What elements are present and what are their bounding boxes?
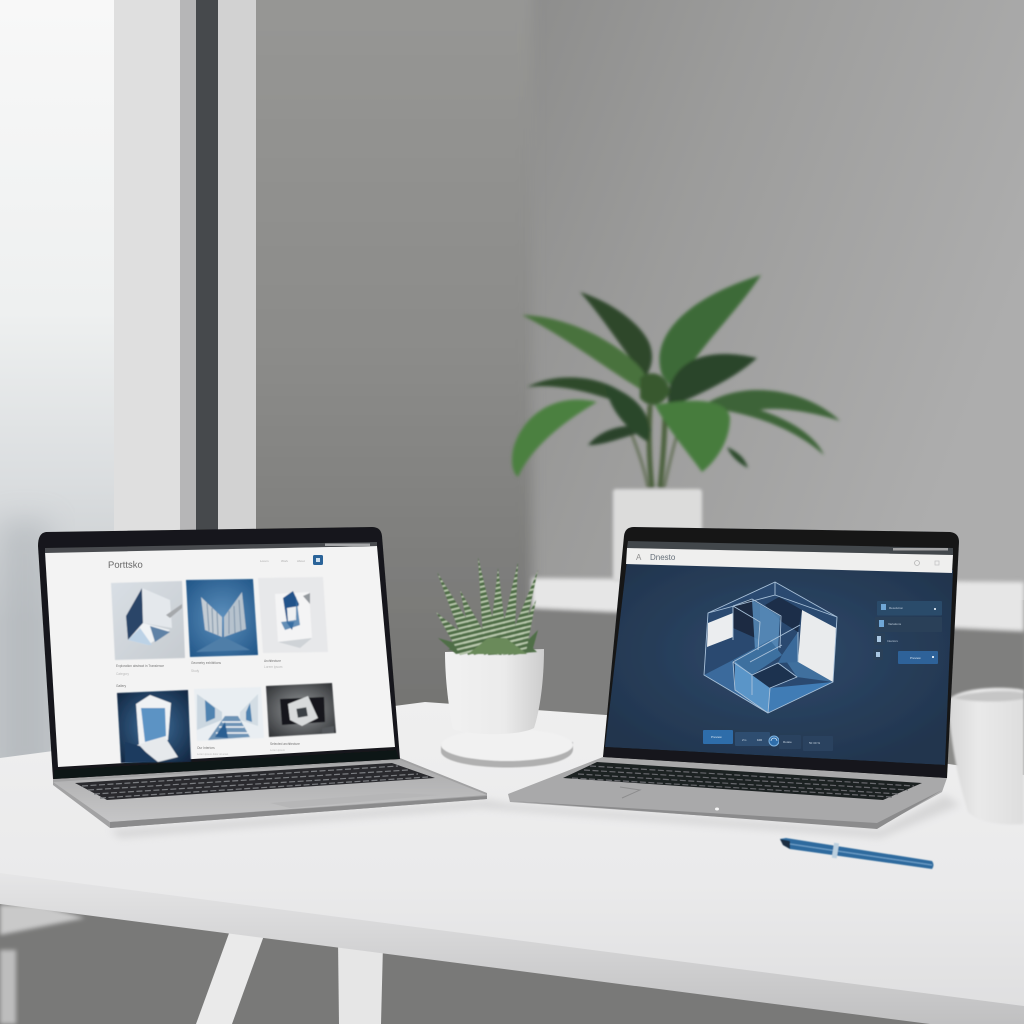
captions row 1: Geometry exhibitions <box>191 661 221 665</box>
captions row 1: Study <box>191 669 200 673</box>
app logo: A <box>636 553 642 562</box>
wall shelf <box>532 578 1024 720</box>
dark inner cubes <box>733 599 760 640</box>
captions row 2: Lorem ipsum <box>270 748 285 752</box>
blue pen <box>780 838 934 869</box>
left laptop base <box>53 758 487 828</box>
keyboard <box>563 762 922 800</box>
captions row 2: Our Interiors <box>197 746 215 750</box>
nav links and button: Work <box>281 559 288 563</box>
thumbnail 2 <box>186 579 258 657</box>
keyboard <box>75 763 435 800</box>
right app header bar <box>626 548 953 573</box>
nav links and button: Lorem <box>260 559 269 563</box>
succulent in white pot <box>436 557 544 734</box>
rotate icon <box>769 736 779 746</box>
white desk <box>0 702 1024 1024</box>
captions row 1: Gallery <box>116 684 127 688</box>
item 4 <box>873 649 883 660</box>
nav links and button <box>260 555 323 565</box>
right laptop lid <box>603 527 959 778</box>
right top status strip <box>627 541 953 555</box>
item 3: Interiors <box>887 639 898 643</box>
right laptop base <box>508 757 947 829</box>
plant pot <box>613 489 702 581</box>
right laptop screen <box>605 560 953 765</box>
isometric wireframe cube <box>704 582 837 713</box>
plant leaves <box>512 275 840 477</box>
segment 1: 100 <box>757 738 762 742</box>
left bottom bezel shadow <box>54 750 399 779</box>
left laptop screen <box>45 546 395 767</box>
wire lines <box>704 582 837 713</box>
captions row 2 <box>197 742 300 756</box>
captions row 1: Architecture <box>264 659 281 663</box>
captions row 1: Category <box>116 672 129 676</box>
thumbnail 5 <box>194 687 264 741</box>
white panels <box>707 613 733 647</box>
action button: Preview <box>910 656 922 660</box>
dropdown 1: Resolution <box>889 606 904 610</box>
captions row 1: Lorem ipsum <box>264 665 283 669</box>
plant stems <box>630 405 680 488</box>
segment 2: Rotate <box>783 740 792 744</box>
desk leg <box>196 925 266 1024</box>
right bottom bezel shadow <box>603 747 947 778</box>
central blue box <box>752 600 780 650</box>
right laptop: 3D viewer <box>508 527 959 829</box>
primary button: Preview <box>711 735 723 739</box>
captions row 1 <box>116 659 283 688</box>
left laptop lid <box>38 527 400 779</box>
header icons <box>914 560 939 566</box>
desk leg <box>338 940 383 1024</box>
white cup <box>948 688 1024 824</box>
left top status strip <box>45 542 377 553</box>
bottom toolbar <box>703 730 833 751</box>
thumbnail 4 <box>117 690 191 763</box>
round white disk <box>441 729 573 768</box>
thumbnail 6 <box>266 683 336 737</box>
segment 3: 50 30 % <box>809 741 820 745</box>
segment 1 <box>735 732 770 746</box>
captions row 1: Exploration abstract in Transience <box>116 664 164 668</box>
captions row 2: Lorem ipsum dolor sit amet <box>197 752 229 756</box>
thumbnail 3 <box>258 577 328 653</box>
left laptop: portfolio gallery <box>38 527 487 828</box>
succulent leaves <box>436 557 538 655</box>
app title: Dnesto <box>650 553 676 562</box>
portfolio title: Porttsko <box>108 560 143 571</box>
captions row 2: Selected architecture <box>270 742 300 746</box>
right side panel <box>873 601 942 664</box>
area under the desk <box>0 860 1024 1024</box>
succulent pot <box>445 649 544 734</box>
nav links and button: About <box>297 559 305 563</box>
thumbnail 1 <box>111 581 185 660</box>
dropdown 2: Variations <box>888 622 902 626</box>
blurred green plant <box>512 275 840 581</box>
segment 1: Zm <box>742 738 747 742</box>
